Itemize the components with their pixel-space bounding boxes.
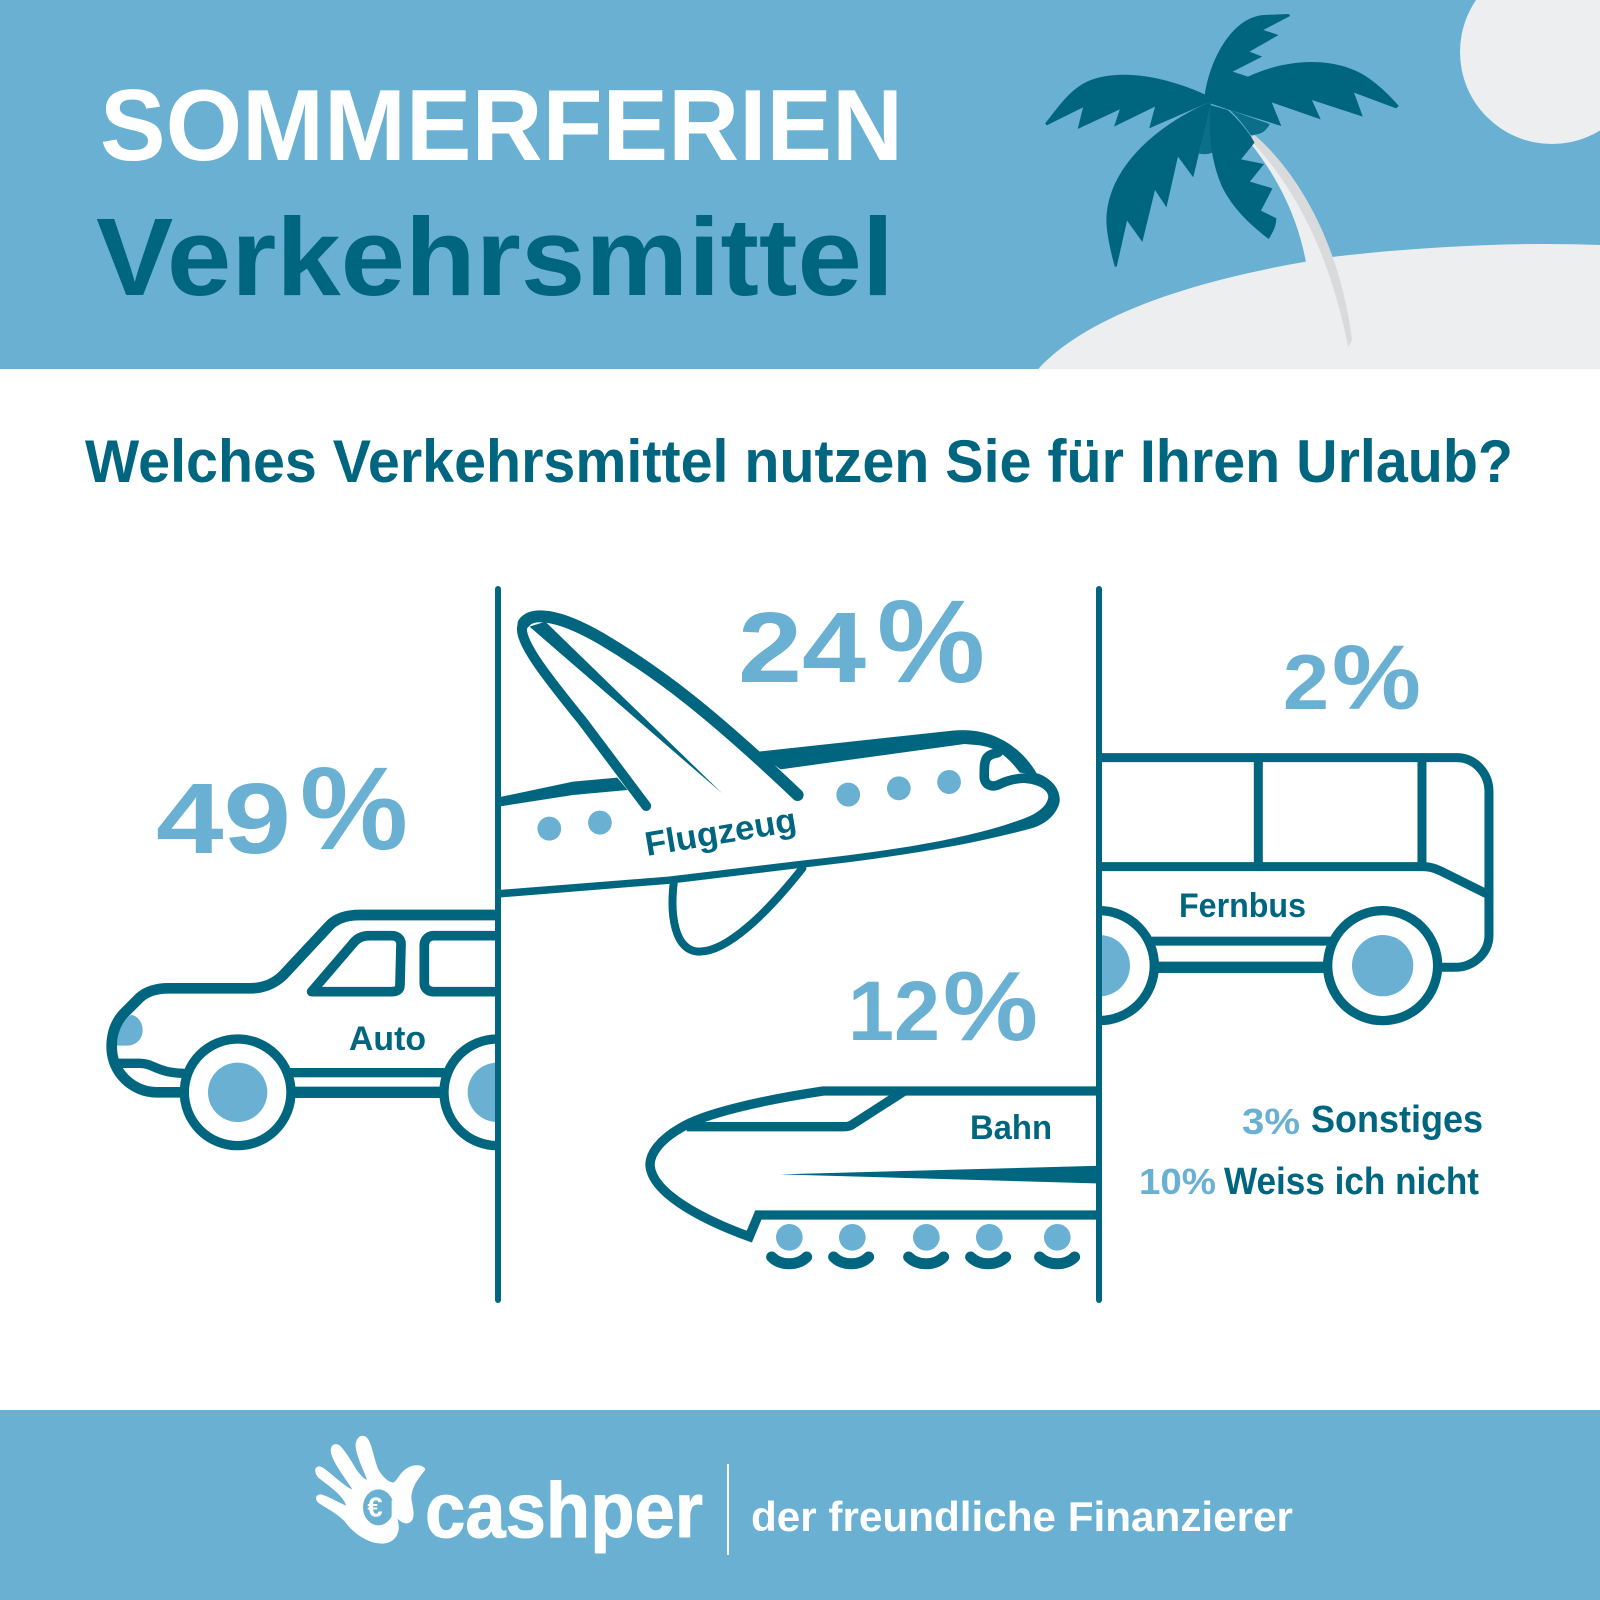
footer banner xyxy=(0,1410,1600,1600)
car label: Auto xyxy=(349,1020,426,1058)
bus label: Fernbus xyxy=(1179,887,1306,925)
column divider right xyxy=(1096,586,1102,1303)
car percentage: % xyxy=(300,743,408,875)
train label: Bahn xyxy=(970,1109,1052,1147)
question heading: Welches Verkehrsmittel nutzen Sie für Ihren Urlaub? xyxy=(85,428,1513,495)
bus percentage: % xyxy=(1332,627,1421,729)
title line 1: SOMMERFERIEN xyxy=(100,70,903,182)
header banner xyxy=(0,0,1600,369)
plane percentage: % xyxy=(877,576,985,708)
car icon xyxy=(112,915,551,1146)
plane percentage xyxy=(738,576,985,708)
other answers: Sonstiges: 3% xyxy=(1242,1101,1300,1142)
title line 2: Verkehrsmittel xyxy=(96,196,894,319)
plane percentage: 24 xyxy=(738,592,866,704)
column divider left xyxy=(495,586,501,1303)
car percentage xyxy=(156,743,408,875)
sand island xyxy=(1038,244,1600,369)
car percentage: 49 xyxy=(156,763,291,875)
other answers: Sonstiges xyxy=(1242,1099,1483,1142)
palm tree xyxy=(1045,14,1399,347)
tagline: der freundliche Finanzierer xyxy=(751,1493,1293,1540)
other answers: Sonstiges: Sonstiges xyxy=(1311,1099,1483,1141)
sun xyxy=(1460,0,1600,144)
train icon xyxy=(650,1091,1103,1264)
other answers: Weiss ich nicht: 10% xyxy=(1139,1161,1216,1202)
bus percentage: 2 xyxy=(1283,638,1329,726)
bus icon xyxy=(1044,758,1489,1021)
train percentage: 12 xyxy=(848,964,940,1058)
cashper hand logo: € xyxy=(367,1492,383,1523)
cashper hand logo xyxy=(318,1438,423,1541)
bus percentage xyxy=(1283,627,1421,729)
cashper wordmark: cashper xyxy=(425,1466,703,1554)
other answers: Weiss ich nicht: Weiss ich nicht xyxy=(1224,1161,1479,1203)
plane label: Flugzeug xyxy=(642,801,799,864)
footer divider xyxy=(727,1464,729,1555)
plane icon xyxy=(499,616,1060,952)
train percentage: % xyxy=(943,951,1038,1061)
train percentage xyxy=(848,951,1038,1061)
